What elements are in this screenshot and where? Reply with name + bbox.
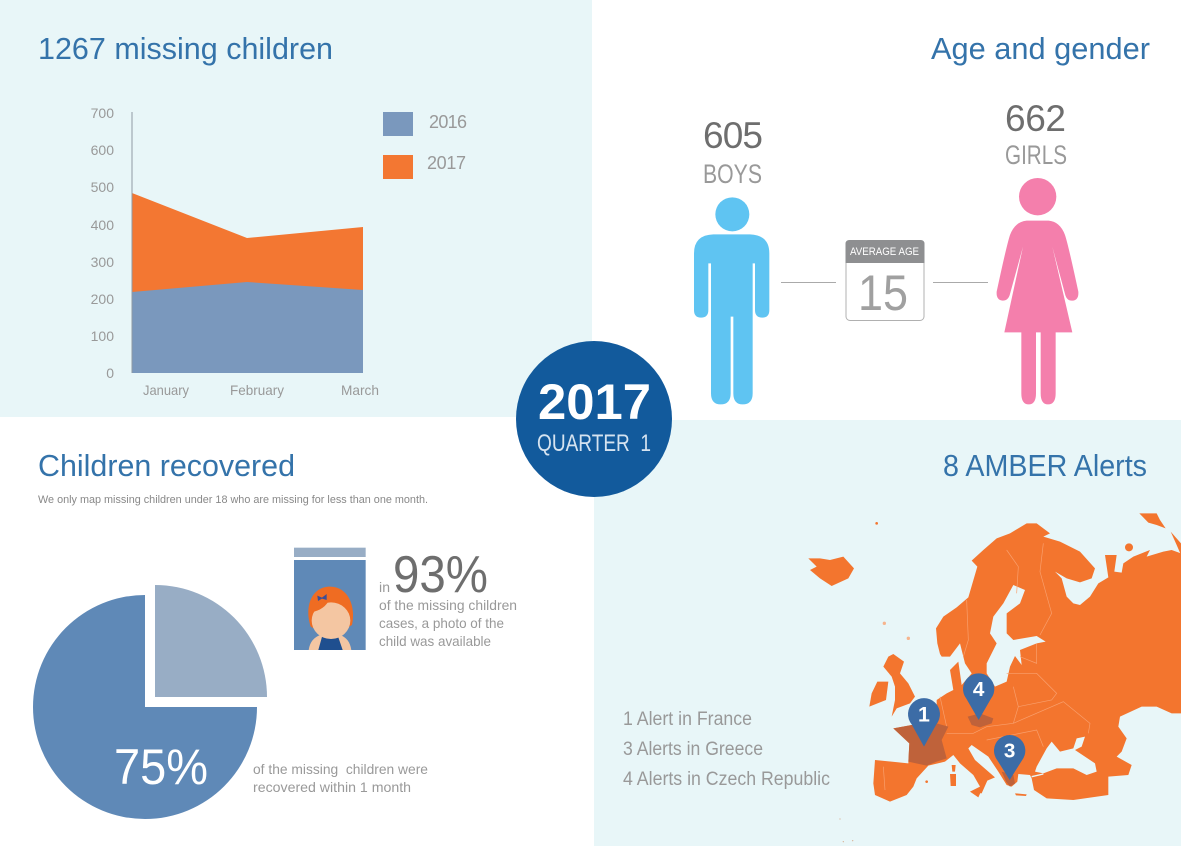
text: recovered within 1 month (253, 761, 428, 795)
x axis labels (143, 382, 379, 398)
calendar: average age: AVERAGE AGE (850, 246, 919, 258)
y axis labels: 100 (91, 328, 114, 344)
alert list (623, 709, 830, 790)
icon: child photo (294, 548, 366, 650)
stat: 93% photo available: cases, a photo of the (379, 615, 504, 631)
highlighted country: france (893, 723, 948, 766)
girls count: GIRLS (1005, 140, 1067, 170)
boys count: 605 (703, 115, 763, 156)
x axis labels: January (143, 382, 189, 398)
heading: children recovered: Children recovered (38, 448, 295, 483)
heading: 8 amber alerts: 8 AMBER Alerts (943, 448, 1147, 483)
legend: 2017 (427, 153, 466, 173)
stat: 93% photo available: child was available (379, 633, 491, 649)
pin 1: france: 1 (918, 703, 930, 727)
pie chart: 75% recovered: 75% (114, 739, 208, 795)
pin 3: greece: 3 (1004, 740, 1015, 763)
y axis labels: 400 (91, 217, 114, 233)
pin 4: czech republic (963, 673, 994, 720)
icon: girl (997, 178, 1078, 404)
boys count: BOYS (703, 159, 762, 189)
map of europe (808, 513, 1181, 842)
alert list: 3 Alerts in Greece (623, 739, 763, 760)
x axis labels: February (230, 382, 284, 398)
heading: 1267 missing children: 1267 missing children (38, 31, 333, 66)
area: 2016 (132, 282, 363, 373)
area: 2017 (132, 193, 363, 293)
y axis labels (91, 105, 114, 381)
y axis labels: 0 (106, 365, 114, 381)
alert list: 4 Alerts in Czech Republic (623, 769, 830, 790)
pie chart: 75% recovered (33, 585, 267, 819)
text: recovered within 1 month: recovered within 1 month (253, 779, 411, 795)
note text: We only map missing children under 18 who are missing for less than one month. (38, 494, 428, 506)
panel: age and gender (694, 31, 1150, 404)
pin 4: czech republic: 4 (973, 678, 985, 701)
water: baltic sea (987, 585, 1046, 687)
stat: 93% photo available: of the missing children (379, 597, 517, 613)
y axis labels: 200 (91, 291, 114, 307)
y axis labels: 300 (91, 254, 114, 270)
y axis labels: 500 (91, 179, 114, 195)
water: black sea (1035, 737, 1097, 775)
stat: 93% photo available (379, 546, 517, 649)
calendar: average age: 15 (858, 265, 908, 321)
stat: 93% photo available: in (379, 579, 390, 595)
boys count (703, 115, 763, 189)
heading: age and gender: Age and gender (931, 31, 1150, 66)
calendar: average age (846, 240, 924, 321)
panel: children recovered (33, 448, 517, 819)
badge: 2017 quarter 1: QUARTER 1 (537, 430, 651, 457)
water: irish sea and marmara strait (1032, 774, 1043, 777)
girls count (1005, 98, 1067, 170)
pin 3: greece (994, 735, 1025, 780)
legend: 2016 (429, 112, 467, 132)
area chart (91, 105, 467, 398)
badge: 2017 quarter 1 (516, 341, 672, 497)
y axis labels: 700 (91, 105, 114, 121)
stat: 93% photo available: 93% (393, 546, 488, 604)
pin 1: france (908, 698, 940, 747)
panel: amber alerts (594, 420, 1181, 846)
y axis labels: 600 (91, 142, 114, 158)
land (808, 513, 1181, 842)
alert list: 1 Alert in France (623, 709, 752, 730)
x axis labels: March (341, 382, 379, 398)
highlighted country: greece (1002, 772, 1015, 787)
borders (883, 543, 1090, 790)
icon: boy (694, 197, 769, 404)
badge: 2017 quarter 1: 2017 (538, 374, 651, 430)
legend (383, 112, 467, 179)
girls count: 662 (1005, 98, 1066, 139)
highlighted country: czech republic (968, 713, 993, 727)
text: recovered within 1 month: of the missing children were (253, 761, 428, 777)
panel: missing children (0, 0, 592, 417)
